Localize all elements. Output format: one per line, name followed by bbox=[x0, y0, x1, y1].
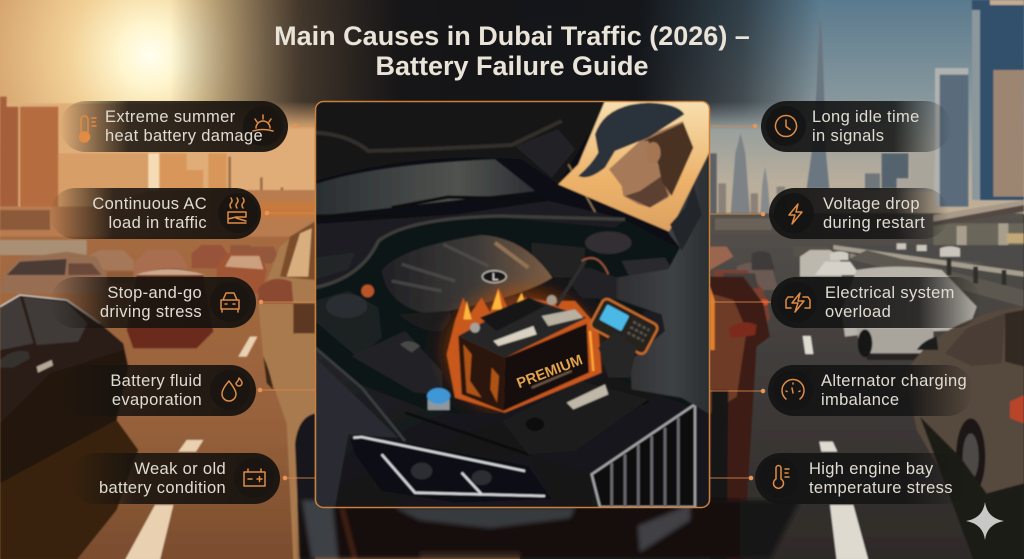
callout: long idle time: in signals bbox=[812, 127, 884, 145]
car by the panel bbox=[710, 277, 770, 559]
brown car bbox=[905, 307, 1024, 559]
dark title band bbox=[170, 0, 820, 130]
title: Main Causes in Dubai Traffic (2026) – bbox=[274, 21, 750, 51]
reservoir box bbox=[352, 331, 443, 394]
right bay components bbox=[532, 243, 585, 278]
panel: engine bay illustration bbox=[315, 101, 710, 507]
icon: sparkle watermark bbox=[966, 502, 1004, 540]
callout: voltage drop: during restart bbox=[823, 214, 925, 232]
grille bbox=[592, 404, 695, 507]
handheld scanner bbox=[589, 297, 659, 356]
callout: extreme summer heat bbox=[60, 101, 288, 152]
windshield bbox=[315, 159, 535, 216]
lane markings bbox=[803, 336, 868, 559]
callout: long idle time bbox=[761, 101, 951, 152]
mechanic bbox=[578, 103, 710, 414]
callout: extreme summer heat: Extreme summer bbox=[105, 108, 236, 126]
callout: high engine bay temperature: High engine bay bbox=[809, 460, 934, 478]
callout: voltage drop bbox=[769, 188, 949, 239]
middle lane traffic bbox=[793, 247, 830, 257]
icon: thermometer bbox=[80, 116, 96, 142]
skyline towers bbox=[935, 68, 968, 207]
callout: battery fluid evaporation: evaporation bbox=[112, 391, 202, 409]
panel border bbox=[316, 102, 710, 508]
callout: electrical overload: Electrical system bbox=[825, 284, 955, 302]
callout: electrical overload bbox=[771, 277, 981, 328]
callout: alternator imbalance: Alternator charging bbox=[821, 372, 967, 390]
callout: continuous AC load bbox=[50, 188, 261, 239]
callout: stop-and-go driving: driving stress bbox=[100, 303, 202, 321]
panel: engine bay illustration: PREMIUM bbox=[515, 352, 585, 392]
callout: long idle time: Long idle time bbox=[812, 108, 920, 126]
headlight bbox=[350, 434, 552, 503]
callout: electrical overload: overload bbox=[825, 303, 891, 321]
callout: extreme summer heat: heat battery damage bbox=[105, 127, 263, 145]
far traffic bbox=[0, 240, 87, 255]
hood underside bbox=[315, 101, 608, 218]
callout: battery fluid evaporation bbox=[60, 365, 256, 416]
callout: voltage drop: Voltage drop bbox=[823, 195, 920, 213]
sky behind mechanic bbox=[558, 101, 710, 233]
background: daytime skyline traffic on the right bbox=[520, 0, 1024, 559]
callout: weak or old battery: battery condition bbox=[99, 479, 226, 497]
near left car bbox=[258, 218, 315, 559]
washer cap bbox=[427, 388, 450, 410]
cowl and bay bbox=[315, 201, 710, 421]
callout: stop-and-go driving bbox=[50, 277, 256, 328]
battery flames bbox=[432, 278, 612, 424]
callout: high engine bay temperature: temperature stress bbox=[809, 479, 953, 497]
callout: weak or old battery bbox=[70, 453, 280, 504]
car front below the panel bbox=[300, 500, 800, 559]
callout: continuous AC load: Continuous AC bbox=[92, 195, 207, 213]
gloved hands and probe bbox=[557, 258, 617, 306]
big dark car bbox=[0, 294, 128, 487]
callout: alternator imbalance: imbalance bbox=[821, 391, 899, 409]
title: Battery Failure Guide bbox=[375, 51, 649, 81]
background: sunset city traffic on the left bbox=[0, 0, 520, 559]
callout: battery fluid evaporation: Battery fluid bbox=[110, 372, 202, 390]
callout: continuous AC load: load in traffic bbox=[108, 214, 207, 232]
lane markings bbox=[125, 337, 257, 559]
callout: stop-and-go driving: Stop-and-go bbox=[107, 284, 202, 302]
front body panel bbox=[315, 346, 710, 507]
callout: high engine bay temperature bbox=[755, 453, 970, 504]
battery bbox=[458, 295, 593, 411]
title bbox=[274, 21, 750, 81]
callout: weak or old battery: Weak or old bbox=[134, 460, 226, 478]
engine cover bbox=[382, 235, 552, 331]
connector lines bbox=[258, 124, 771, 480]
callout: alternator imbalance bbox=[768, 365, 973, 416]
white car bbox=[842, 267, 977, 337]
